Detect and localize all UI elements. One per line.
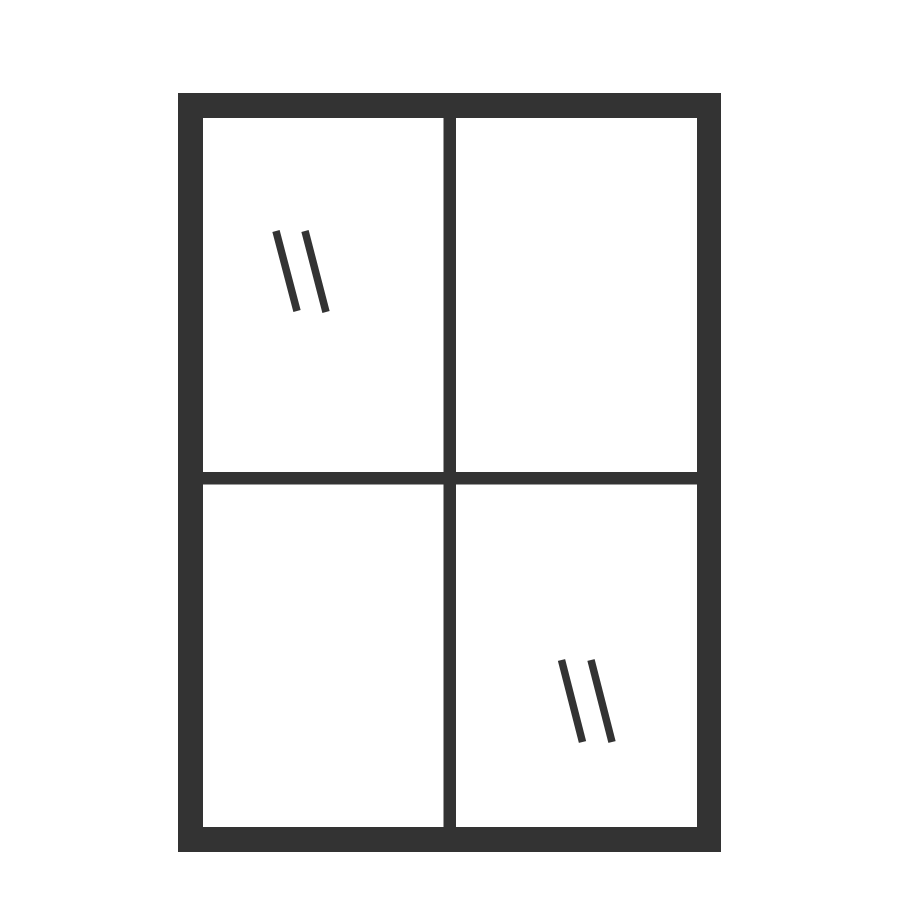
glass glare: lower right pane <box>562 660 612 742</box>
window frame <box>178 93 721 852</box>
horizontal mullion <box>203 472 697 484</box>
vertical mullion <box>444 118 456 827</box>
glass glare: upper left pane <box>276 231 326 312</box>
